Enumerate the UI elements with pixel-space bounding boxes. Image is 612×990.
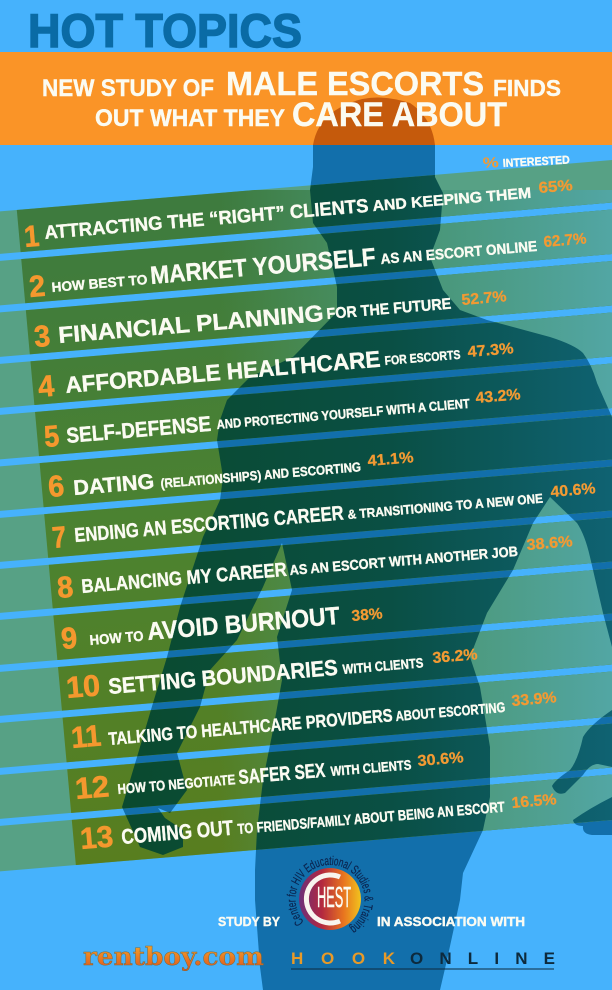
banner headline: NEW STUDY OF xyxy=(42,75,214,102)
row 1: AND KEEPING THEM xyxy=(372,185,532,215)
row 8 xyxy=(56,533,573,605)
banner headline: FINDS xyxy=(493,75,561,101)
row 6: 41.1% xyxy=(367,449,414,470)
green striped panel xyxy=(0,159,612,872)
row 3: 52.7% xyxy=(461,288,507,309)
row 9: 38% xyxy=(351,605,383,625)
row 10 xyxy=(65,646,478,705)
row 2: HOW BEST TO xyxy=(51,272,148,295)
row 10: WITH CLIENTS xyxy=(342,655,424,677)
logo: Hook Online: HOOK xyxy=(291,949,396,968)
row 7: 40.6% xyxy=(550,480,596,501)
banner headline: OUT WHAT THEY xyxy=(95,105,285,132)
row 11: ABOUT ESCORTING xyxy=(395,699,506,724)
row 8: 38.6% xyxy=(526,533,573,554)
row 12: SAFER SEX xyxy=(238,760,327,789)
row 9: HOW TO xyxy=(89,628,144,648)
row 1 xyxy=(23,177,573,254)
row 8: BALANCING MY CAREER xyxy=(81,559,288,598)
row 12 xyxy=(74,749,464,806)
silhouette of a man xyxy=(122,145,612,990)
row 7: 7 xyxy=(51,521,68,555)
in association with label: IN ASSOCIATION WITH xyxy=(377,915,525,929)
row 5: 5 xyxy=(43,420,61,454)
row 5: AND PROTECTING YOURSELF WITH A CLIENT xyxy=(216,396,470,432)
row 9: 9 xyxy=(60,622,79,656)
row 5: 43.2% xyxy=(475,386,521,407)
row 11 xyxy=(70,689,557,755)
row 5 xyxy=(43,386,521,454)
row 1: ATTRACTING THE “RIGHT” CLIENTS xyxy=(44,196,369,244)
row 13 xyxy=(79,791,557,856)
row 6: DATING xyxy=(72,470,155,500)
row 11: TALKING TO HEALTHCARE PROVIDERS xyxy=(108,705,393,749)
row 6: (RELATIONSHIPS) AND ESCORTING xyxy=(160,459,362,491)
row 3: 3 xyxy=(33,320,52,354)
row 2: AS AN ESCORT ONLINE xyxy=(380,239,538,268)
row 10: 10 xyxy=(65,669,101,705)
row 10: 36.2% xyxy=(432,646,478,667)
row 13: COMING OUT xyxy=(120,817,234,849)
row 4: 4 xyxy=(37,370,56,404)
row 7 xyxy=(51,480,596,555)
logo: CHEST: HEST xyxy=(317,882,351,914)
row 8: AS AN ESCORT WITH ANOTHER JOB xyxy=(289,543,518,578)
orange banner xyxy=(0,52,612,145)
row 11: 33.9% xyxy=(511,689,557,710)
row 4: AFFORDABLE HEALTHCARE xyxy=(64,346,381,398)
row 3: FINANCIAL PLANNING xyxy=(57,300,324,348)
banner headline: CARE ABOUT xyxy=(292,96,507,134)
row 12: WITH CLIENTS xyxy=(330,757,412,779)
column header: percent interested: % xyxy=(482,154,499,172)
row 12: 30.6% xyxy=(417,749,464,770)
logo: CHEST: Center for HIV Educational Studies & Training xyxy=(286,856,374,933)
row 10: SETTING BOUNDARIES xyxy=(107,655,339,699)
row 1: 1 xyxy=(23,220,41,254)
row 2: 62.7% xyxy=(543,230,587,251)
row 13: 16.5% xyxy=(511,791,557,812)
study by label: STUDY BY xyxy=(218,915,281,929)
row 6: 6 xyxy=(47,470,66,504)
row 12: 12 xyxy=(74,770,110,806)
logo: Hook Online xyxy=(291,949,555,970)
banner headline xyxy=(42,65,561,134)
row 2 xyxy=(28,230,587,304)
row 7: ENDING AN ESCORTING CAREER xyxy=(74,502,345,547)
row 9 xyxy=(60,602,383,656)
logo: Hook Online: ONLINE xyxy=(410,949,555,968)
row 4: 47.3% xyxy=(467,340,514,361)
row 2: 2 xyxy=(28,270,47,304)
row 1: 65% xyxy=(538,177,573,197)
banner headline: MALE ESCORTS xyxy=(226,65,484,102)
column header: percent interested xyxy=(482,154,570,172)
column header: percent interested: INTERESTED xyxy=(503,155,570,170)
row 12: HOW TO NEGOTIATE xyxy=(117,771,236,797)
logo: rentboy.com: rentboy.com xyxy=(83,942,264,971)
row 13: TO FRIENDS/FAMILY ABOUT BEING AN ESCORT xyxy=(237,800,505,838)
row 3 xyxy=(33,288,507,354)
row 11: 11 xyxy=(70,720,102,755)
row 5: SELF-DEFENSE xyxy=(65,412,212,448)
title: HOT TOPICS xyxy=(28,4,302,57)
row 9: AVOID BURNOUT xyxy=(146,602,341,646)
row 13: 13 xyxy=(79,820,114,856)
row 4 xyxy=(37,340,514,404)
row 2: MARKET YOURSELF xyxy=(149,243,377,290)
row 8: 8 xyxy=(56,571,75,605)
row 4: FOR ESCORTS xyxy=(384,348,461,368)
row 6 xyxy=(47,449,414,504)
row 7: & TRANSITIONING TO A NEW ONE xyxy=(347,491,544,522)
row 3: FOR THE FUTURE xyxy=(326,296,452,323)
